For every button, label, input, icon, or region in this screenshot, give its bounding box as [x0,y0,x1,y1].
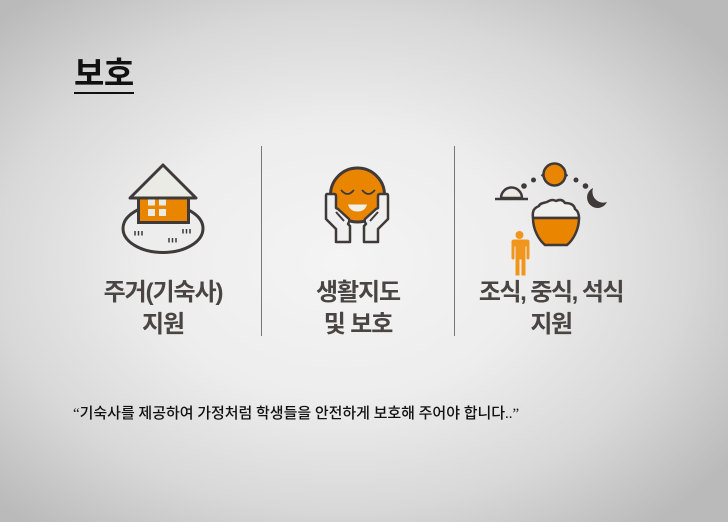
label: housing: 주거(기숙사) [104,279,222,306]
label: housing: 지원 [142,311,184,338]
title: 보호 [74,55,134,92]
label: life guidance: 및 보호 [324,311,392,338]
label: life guidance [316,279,400,338]
label: meals: 지원 [530,311,572,338]
quote text: “기숙사를 제공하여 가정처럼 학생들을 안전하게 보호해 주어야 합니다..” [73,406,519,422]
label: housing [104,279,222,338]
label: life guidance: 생활지도 [316,279,400,306]
label: meals: 조식, 중식, 석식 [479,279,623,306]
label: meals [479,279,623,338]
